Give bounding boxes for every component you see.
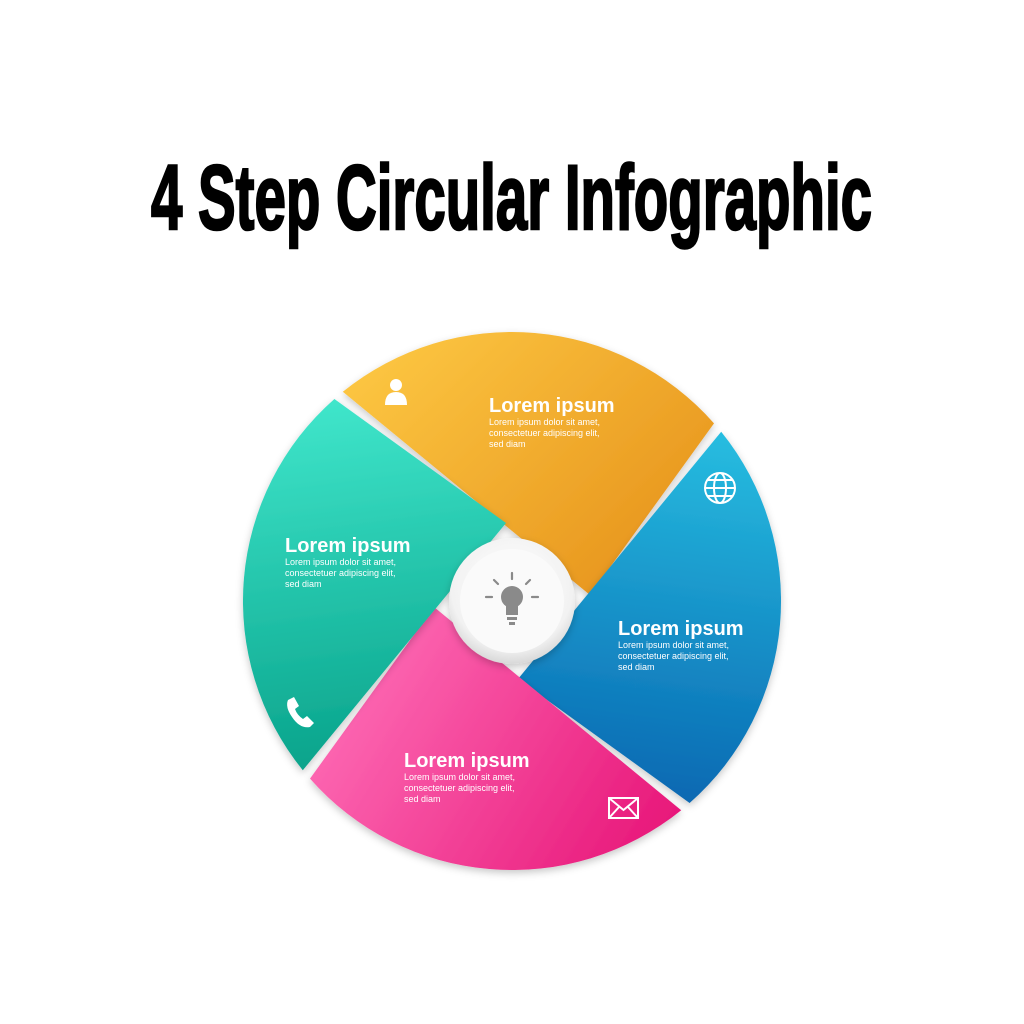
text: pink: Lorem ipsum [404,750,530,772]
icon: light bulb [486,573,538,625]
text: teal: Lorem ipsum dolor sit amet, [285,557,396,567]
text: orange: Lorem ipsum dolor sit amet, [489,417,600,427]
segment: blue [518,432,781,803]
text: orange: Lorem ipsum [489,395,615,417]
text: blue: Lorem ipsum [618,618,744,640]
text: orange [489,395,615,449]
text: teal: Lorem ipsum [285,535,411,557]
segment: orange [343,332,714,595]
icon: mail [609,798,638,818]
text: blue: Lorem ipsum dolor sit amet, [618,640,729,650]
icon: phone [287,697,314,727]
text: teal: consectetuer adipiscing elit, [285,568,396,578]
text: orange: sed diam [489,439,526,449]
text: teal [285,535,411,589]
icon: globe [705,473,735,503]
text: pink: Lorem ipsum dolor sit amet, [404,772,515,782]
text: teal: sed diam [285,579,322,589]
text: pink: sed diam [404,794,441,804]
icon: person [385,379,407,405]
center circle [449,538,575,664]
segment: pink [310,607,681,870]
circular diagram [243,332,781,870]
text: pink [404,750,530,804]
text: pink: consectetuer adipiscing elit, [404,783,515,793]
text: blue [618,618,744,672]
text: blue: consectetuer adipiscing elit, [618,651,729,661]
text: orange: consectetuer adipiscing elit, [489,428,600,438]
text: blue: sed diam [618,662,655,672]
segment: teal [243,399,506,770]
